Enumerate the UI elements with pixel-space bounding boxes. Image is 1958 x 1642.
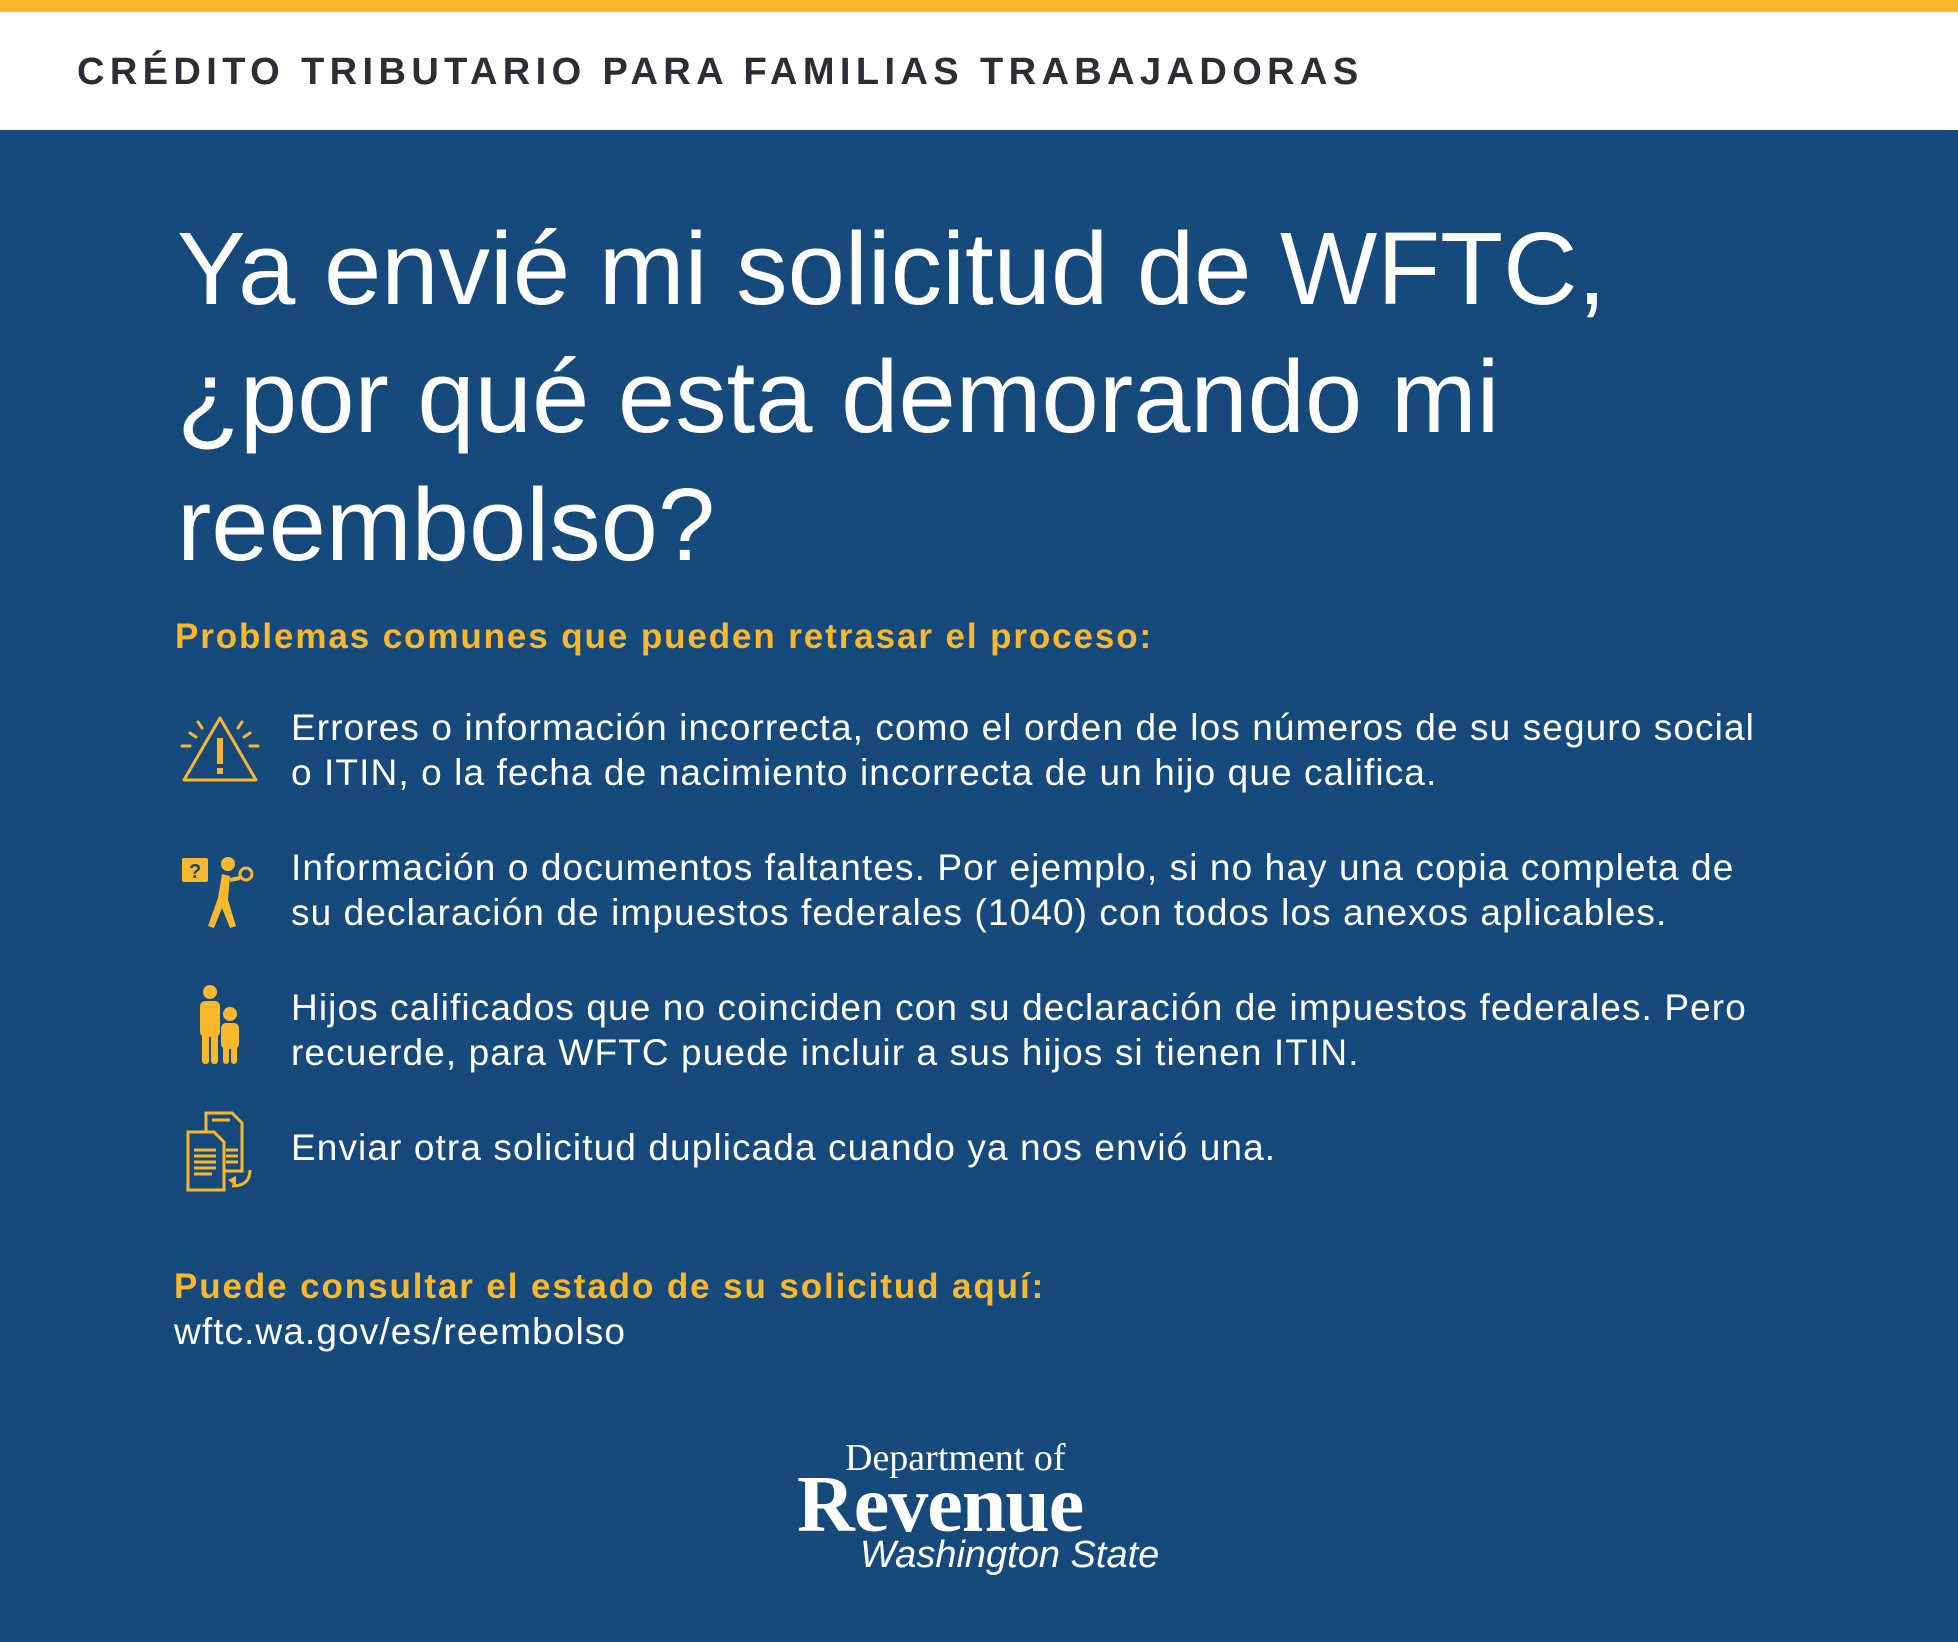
logo: [797, 1437, 1159, 1576]
item 1 text: [291, 707, 1755, 793]
item 3 text: recuerde, para WFTC puede incluir a sus hijos si tienen ITIN.: [291, 1032, 1360, 1073]
item 1 text: Errores o información incorrecta, como el orden de los números de su seguro social: [291, 707, 1755, 748]
logo: Department of: [845, 1437, 1066, 1479]
item 1 text: o ITIN, o la fecha de nacimiento incorrecta de un hijo que califica.: [291, 752, 1437, 793]
header band: [0, 12, 1958, 130]
status url: wftc.wa.gov/es/reembolso: [174, 1311, 626, 1352]
item 2 text: [291, 847, 1734, 933]
top yellow bar: [0, 0, 1958, 12]
item 4 text: Enviar otra solicitud duplicada cuando ya nos envió una.: [291, 1127, 1276, 1168]
main heading: [177, 211, 1606, 582]
main heading: Ya envié mi solicitud de WFTC,: [177, 211, 1606, 326]
status label: Puede consultar el estado de su solicitud aquí:: [174, 1267, 1045, 1306]
main heading: ¿por qué esta demorando mi: [177, 339, 1500, 454]
main heading: reembolso?: [177, 467, 715, 582]
item 2 text: Información o documentos faltantes. Por ejemplo, si no hay una copia completa de: [291, 847, 1734, 888]
icon: warning: [180, 716, 260, 782]
icon: duplicate documents: [186, 1112, 252, 1192]
logo: Revenue: [797, 1461, 1083, 1549]
logo: Washington State: [860, 1534, 1159, 1576]
icon: parent and child: [200, 985, 239, 1064]
item 2 text: su declaración de impuestos federales (1040) con todos los anexos aplicables.: [291, 892, 1667, 933]
item 3 text: Hijos calificados que no coinciden con su declaración de impuestos federales. Pero: [291, 987, 1747, 1028]
item 3 text: [291, 987, 1747, 1073]
icon: person searching: [182, 857, 254, 928]
header title: CRÉDITO TRIBUTARIO PARA FAMILIAS TRABAJADORAS: [77, 51, 1364, 93]
icon: person searching: ?: [189, 861, 201, 883]
subheading: Problemas comunes que pueden retrasar el proceso:: [175, 617, 1153, 656]
